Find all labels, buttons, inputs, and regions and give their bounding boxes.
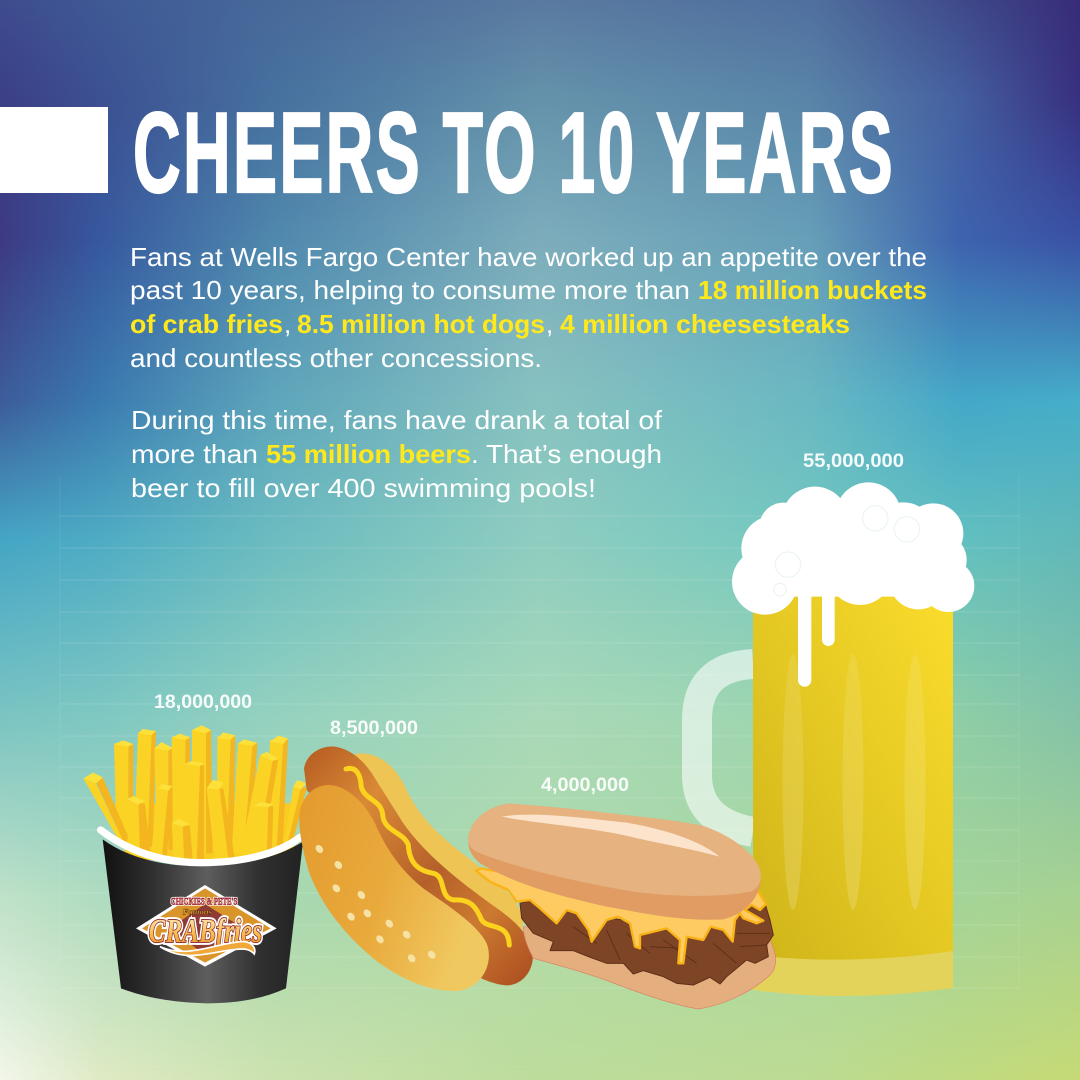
value labels: 8,500,000 bbox=[330, 718, 418, 739]
value labels: 4,000,000 bbox=[541, 775, 629, 796]
intro paragraph bbox=[130, 242, 927, 373]
top roll bbox=[468, 804, 761, 920]
white title block bbox=[0, 107, 108, 193]
value labels: 18,000,000 bbox=[154, 692, 252, 713]
crabfries logo: Famous bbox=[182, 906, 213, 916]
value labels: 55,000,000 bbox=[803, 451, 904, 472]
beer paragraph: During this time, fans have drank a total of bbox=[131, 405, 663, 435]
crabfries logo bbox=[136, 885, 277, 967]
sausage bbox=[304, 746, 533, 985]
value labels bbox=[154, 451, 904, 796]
crabfries logo: CHICKIES & PETE'S bbox=[171, 897, 237, 907]
sesame seeds bbox=[314, 844, 437, 964]
beer paragraph: 55 million beers bbox=[266, 439, 471, 469]
back bun bbox=[355, 753, 523, 940]
intro paragraph: 18 million buckets bbox=[698, 275, 927, 305]
roll highlight bbox=[502, 815, 719, 857]
bottom roll bbox=[523, 927, 776, 1009]
intro paragraph: past 10 years, helping to consume more than bbox=[130, 275, 690, 305]
beer foam bbox=[732, 482, 974, 687]
beer body bbox=[753, 585, 953, 960]
beer paragraph: . That’s enough bbox=[471, 439, 662, 469]
cheesesteak bbox=[468, 804, 776, 1009]
crabfries logo: CRABfries bbox=[149, 913, 262, 950]
intro paragraph: , bbox=[546, 309, 553, 339]
meat bbox=[520, 898, 773, 985]
front bun bbox=[299, 785, 489, 991]
intro paragraph: , bbox=[284, 309, 291, 339]
cheese bbox=[476, 868, 766, 963]
intro paragraph: 4 million cheesesteaks bbox=[560, 309, 850, 339]
crabfries logo: CHICKIES & PETE'S bbox=[171, 897, 237, 907]
bucket body bbox=[103, 839, 303, 1003]
beer mug bbox=[697, 482, 974, 996]
mug handle bbox=[697, 664, 753, 832]
french fries bucket bbox=[83, 725, 307, 1003]
front fries bbox=[96, 777, 128, 845]
beer paragraph: more than bbox=[131, 439, 258, 469]
bucket rim bbox=[101, 830, 300, 863]
beer paragraph: beer to fill over 400 swimming pools! bbox=[131, 473, 596, 503]
intro paragraph: 8.5 million hot dogs bbox=[297, 309, 545, 339]
hot dog bbox=[299, 746, 533, 991]
intro paragraph: of crab fries bbox=[130, 309, 283, 339]
crabfries logo: CRABfries bbox=[149, 913, 262, 950]
mustard bbox=[346, 768, 509, 945]
beer paragraph bbox=[131, 405, 663, 503]
mug base bbox=[753, 945, 953, 996]
intro paragraph: Fans at Wells Fargo Center have worked up an appetite over the bbox=[130, 242, 927, 272]
beer highlights bbox=[782, 654, 926, 910]
intro paragraph: and countless other concessions. bbox=[130, 343, 542, 373]
fries bbox=[83, 725, 307, 860]
